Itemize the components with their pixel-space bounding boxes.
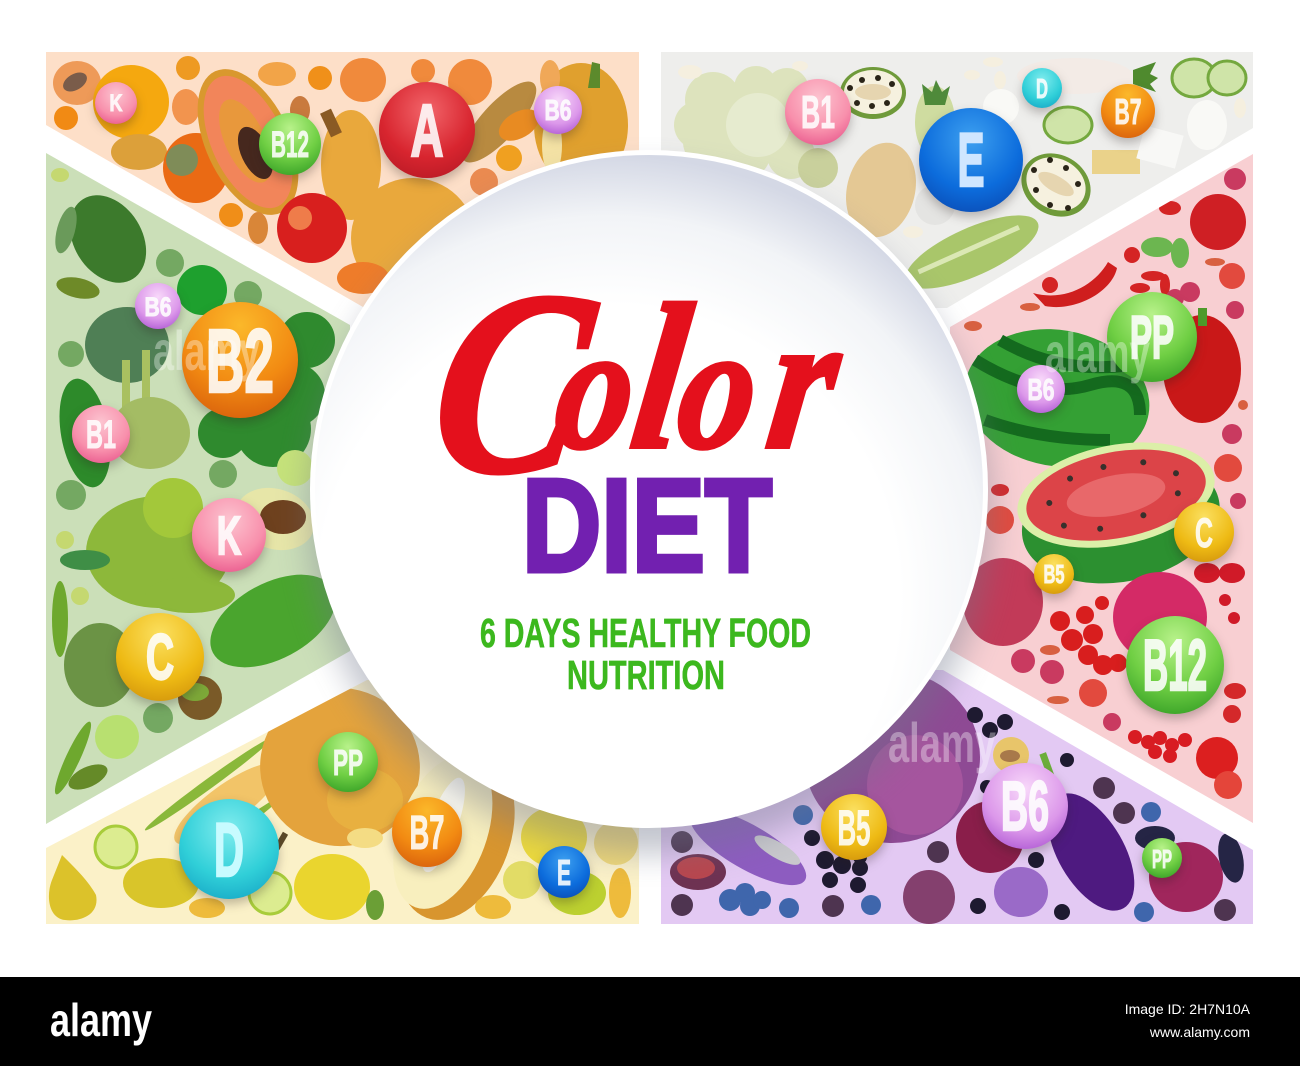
watermarks: alamy bbox=[888, 711, 996, 774]
icon: pea pods bbox=[50, 581, 96, 797]
title: Color: C bbox=[418, 237, 609, 528]
subtitle line one: 6 DAYS HEALTHY FOOD bbox=[480, 610, 811, 656]
icon: kiwi slice bbox=[56, 277, 100, 299]
vitamin B6: B6 bbox=[1001, 767, 1049, 845]
vitamin C bbox=[116, 613, 204, 701]
icon: pumpkin bbox=[534, 62, 628, 166]
subtitle line two: NUTRITION bbox=[567, 652, 725, 698]
watermarks bbox=[153, 319, 1150, 774]
vitamin B5: B5 bbox=[1044, 559, 1064, 589]
vitamin B12 bbox=[1126, 616, 1224, 714]
icon: kohlrabi bbox=[85, 307, 190, 469]
icon: lime bbox=[177, 265, 227, 315]
icon: cucumber slices bbox=[1044, 59, 1246, 143]
footer bar bbox=[0, 977, 1300, 1066]
icon: blackcurrants bbox=[804, 707, 1074, 920]
icon: blueberries bbox=[719, 802, 1161, 922]
icon: yellow fruit group bbox=[503, 807, 638, 915]
icon: papaya bbox=[198, 69, 298, 215]
icon: cauliflower bbox=[674, 66, 838, 188]
panel: green foods bbox=[46, 153, 351, 824]
vitamin E bbox=[919, 108, 1023, 212]
icon: pear bbox=[49, 855, 97, 920]
vitamin D bbox=[179, 799, 279, 899]
icon: apricot half bbox=[53, 61, 101, 105]
vitamin B6 bbox=[1017, 365, 1065, 413]
watermarks: alamy bbox=[1045, 321, 1150, 384]
icon: melon half bbox=[372, 736, 536, 936]
plate shadow bbox=[308, 170, 992, 854]
footer logo: alamy bbox=[50, 994, 152, 1046]
panel: yellow foods bbox=[46, 665, 639, 936]
icon: eggplant bbox=[1030, 752, 1152, 925]
panel: orange foods bbox=[46, 52, 639, 330]
vitamin C bbox=[1174, 502, 1234, 562]
icon: physalis bbox=[111, 134, 167, 170]
vitamin K bbox=[192, 498, 266, 572]
icon: purple corn bbox=[680, 795, 816, 899]
vitamin B1 bbox=[785, 79, 851, 145]
icon: bell pepper bbox=[1163, 308, 1241, 423]
icon: brussels sprouts bbox=[56, 249, 262, 733]
icon: red cabbage bbox=[804, 671, 980, 843]
vitamin B6: B6 bbox=[1028, 372, 1054, 407]
title: Color: o bbox=[668, 288, 770, 486]
vitamin B6 bbox=[534, 86, 582, 134]
icon: kiwi bbox=[178, 676, 222, 720]
icon: cherry tomatoes bbox=[1050, 596, 1127, 675]
icon: green grapes bbox=[51, 168, 89, 605]
vitamin B5: B5 bbox=[838, 800, 870, 856]
vitamin B12: B12 bbox=[271, 124, 309, 165]
icon: beetroot bbox=[956, 801, 1024, 873]
vitamin A: A bbox=[410, 89, 444, 172]
vitamin K bbox=[95, 82, 137, 124]
icon: artichoke bbox=[64, 623, 136, 707]
icon: star fruit bbox=[123, 858, 199, 908]
vitamin PP: PP bbox=[333, 742, 363, 783]
vitamin B12 bbox=[259, 113, 321, 175]
vitamin B6: B6 bbox=[544, 95, 572, 127]
title: DIET: DIET bbox=[522, 452, 772, 599]
icon: blackberries bbox=[671, 777, 1236, 921]
vitamin PP bbox=[1107, 292, 1197, 382]
icon: cherries bbox=[1194, 563, 1245, 624]
icon: plum bbox=[994, 867, 1048, 917]
icon: daikon bbox=[1133, 62, 1158, 92]
vitamin D bbox=[1022, 68, 1062, 108]
vitamin B1: B1 bbox=[86, 413, 116, 457]
icon: orange fruit bbox=[54, 65, 169, 139]
footer url: www.alamy.com bbox=[1149, 1024, 1250, 1040]
vitamin B6 bbox=[982, 763, 1068, 849]
icon: kale bbox=[210, 574, 334, 668]
icon: kiwi slice lower bbox=[65, 759, 111, 795]
icon: rose hips bbox=[964, 258, 1248, 723]
icon: romanesco bbox=[60, 478, 235, 613]
icon: peaches bbox=[340, 58, 492, 105]
vitamin E: E bbox=[557, 852, 571, 893]
icon: tomato and strawberry half bbox=[1196, 737, 1242, 799]
icon: corn bbox=[142, 734, 305, 876]
icon: lime slices bbox=[95, 826, 291, 914]
vitamin K: K bbox=[110, 90, 123, 117]
vitamin B12: B12 bbox=[1143, 626, 1207, 706]
vitamin B1 bbox=[72, 405, 130, 463]
icon: apple bbox=[277, 193, 347, 263]
title: Color: o bbox=[546, 288, 648, 486]
icon: fennel bbox=[915, 80, 954, 148]
icon: carrot bbox=[337, 262, 389, 294]
vitamin B5 bbox=[1034, 554, 1074, 594]
panel: purple foods bbox=[661, 670, 1253, 925]
vitamin C: C bbox=[146, 621, 174, 693]
icon: watermelon half bbox=[1008, 427, 1231, 600]
icon: pomegranate whole bbox=[1113, 572, 1207, 662]
vitamin B6 bbox=[135, 283, 181, 329]
icon: zucchini bbox=[908, 215, 1038, 289]
icon: melon bbox=[238, 665, 442, 869]
footer image id: Image ID: 2H7N10A bbox=[1125, 1001, 1251, 1017]
vitamin B7 bbox=[1101, 84, 1155, 138]
title: Color: r bbox=[758, 272, 853, 490]
icon: broccoli bbox=[198, 312, 335, 467]
icon: rowan berries bbox=[1128, 730, 1192, 763]
icon: plum half bbox=[993, 737, 1029, 773]
icon: butternut squash bbox=[320, 108, 464, 274]
icon: white mushrooms bbox=[915, 89, 1227, 225]
icon: fig bbox=[903, 870, 955, 924]
plate circle bbox=[310, 150, 988, 828]
icon: avocado half bbox=[240, 488, 313, 550]
icon: small oranges and almonds bbox=[219, 60, 560, 244]
icon: apple bbox=[1190, 194, 1246, 250]
icon: lime slice bbox=[277, 450, 313, 486]
vitamin balls bbox=[72, 68, 1234, 899]
icon: enoki mushrooms bbox=[846, 142, 916, 238]
vitamin B7: B7 bbox=[1114, 91, 1142, 132]
icon: red onion bbox=[1149, 842, 1223, 912]
vitamin PP: PP bbox=[1130, 304, 1174, 371]
icon: raisins bbox=[1135, 826, 1248, 885]
icon: citrus slices bbox=[189, 828, 631, 919]
title: Color: l bbox=[621, 262, 701, 492]
vitamin PP bbox=[1142, 838, 1182, 878]
icon: cucumber bbox=[60, 378, 110, 488]
icon: persimmon bbox=[163, 133, 229, 203]
icon: soursop half top bbox=[840, 67, 906, 119]
icon: pomegranate half bbox=[963, 558, 1043, 646]
icon: cloudberry and dried slices bbox=[172, 56, 332, 125]
vitamin B2: B2 bbox=[206, 312, 274, 412]
icon: watermelon whole bbox=[954, 315, 1160, 481]
icon: fig half bbox=[670, 854, 726, 890]
icon: chili bbox=[1033, 262, 1117, 307]
watermarks: alamy bbox=[153, 319, 260, 382]
vitamin E bbox=[538, 846, 590, 898]
vitamin B2 bbox=[182, 302, 298, 418]
vitamin A bbox=[379, 82, 475, 178]
vitamin D: D bbox=[1036, 73, 1048, 104]
icon: raspberries bbox=[1011, 168, 1246, 731]
panel: red foods bbox=[950, 154, 1253, 823]
vitamin K: K bbox=[217, 506, 241, 566]
vitamin E: E bbox=[958, 118, 984, 203]
vitamin D: D bbox=[214, 808, 244, 893]
icon: avocado bbox=[55, 195, 146, 283]
icon: goji and leaves bbox=[1042, 201, 1189, 296]
icon: lime half bbox=[95, 715, 139, 759]
icon: quince bbox=[294, 854, 384, 920]
vitamin PP: PP bbox=[1152, 844, 1172, 874]
vitamin C: C bbox=[1195, 509, 1213, 556]
icon: sweet potato bbox=[464, 82, 536, 162]
vitamin B7 bbox=[392, 797, 462, 867]
icon: small nut bbox=[290, 96, 310, 119]
panel: white foods bbox=[661, 52, 1253, 308]
vitamin B1: B1 bbox=[801, 86, 835, 138]
icon: soursop half lower bbox=[1021, 153, 1091, 217]
vitamin B7: B7 bbox=[410, 807, 444, 860]
icon: cheese and tofu bbox=[1092, 125, 1184, 174]
vitamin PP bbox=[318, 732, 378, 792]
vitamin B6: B6 bbox=[144, 292, 172, 322]
icon: white beans bbox=[678, 57, 1246, 238]
icon: strawberries bbox=[986, 263, 1245, 707]
vitamin B5 bbox=[821, 794, 887, 860]
